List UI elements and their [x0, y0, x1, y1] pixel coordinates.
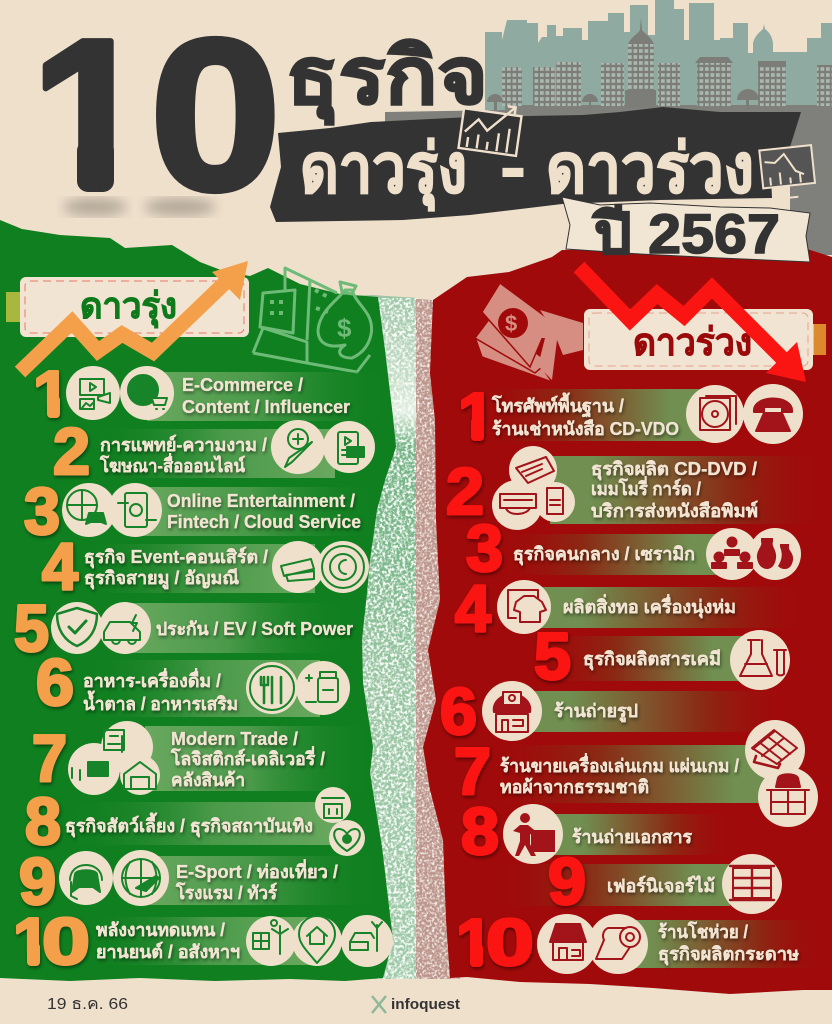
- row 10 falling: ธุรกิจผลิตกระดาษ: [658, 944, 799, 966]
- row 1 falling: โทรศัพท์พื้นฐาน /: [491, 392, 624, 418]
- row 7 falling: 7: [454, 734, 491, 808]
- row 9 rising: [19, 844, 385, 918]
- row 7 rising: Modern Trade /: [171, 729, 298, 749]
- year label: ปี 2567: [592, 202, 780, 265]
- row 6 falling: [440, 674, 795, 748]
- row 6 rising: [36, 645, 350, 719]
- row 7 rising: คลังสินค้า: [171, 770, 245, 790]
- row 8 falling: 8: [461, 794, 499, 868]
- row 5 rising: 5: [14, 591, 49, 665]
- panel: falling heading pill: [584, 309, 826, 370]
- row 2 rising: 2: [53, 414, 90, 488]
- row 10 rising: 1: [13, 904, 50, 978]
- dark torn banner: [270, 107, 801, 222]
- row 10 rising: ยานยนต์ / อสังหาฯ: [96, 941, 240, 962]
- banner headline falling: ดาวร่วง: [546, 131, 754, 207]
- row 2 falling: บริการส่งหนังสือพิมพ์: [591, 500, 758, 521]
- row 2 rising: โฆษณา-สื่อออนไลน์: [99, 453, 246, 476]
- row 6 falling: 6: [440, 674, 477, 748]
- row 2 falling: [446, 446, 832, 530]
- row 1 rising: Content / Influencer: [182, 397, 350, 417]
- logo: infoquest: [391, 996, 460, 1013]
- date: 19 ธ.ค. 66: [47, 996, 128, 1013]
- green panel: [0, 220, 396, 981]
- row 4 falling: ผลิตสิ่งทอ เครื่องนุ่งห่ม: [563, 594, 736, 619]
- row 7 falling: [454, 720, 818, 827]
- row 9 falling: 9: [548, 844, 586, 918]
- arrow: red falling: [579, 267, 806, 382]
- icon: falling chart monitor: [759, 145, 816, 200]
- row 2 rising: การแพทย์-ความงาม /: [100, 434, 267, 455]
- row 9 rising: E-Sport / ท่องเที่ยว /: [176, 859, 338, 882]
- row 10 falling: 0: [486, 905, 534, 979]
- row 8 rising: ธุรกิจสัตว์เลี้ยง / ธุรกิจสถาบันเทิง: [65, 812, 313, 838]
- row 2 rising: [53, 414, 375, 488]
- row 1 falling: ร้านเช่าหนังสือ CD-VDO: [492, 419, 679, 439]
- row 3 rising: 3: [24, 474, 60, 548]
- panel: falling heading pill: ดาวร่วง: [633, 322, 752, 364]
- row 9 rising: 9: [19, 844, 56, 918]
- row 7 falling: ทอผ้าจากธรรมชาติ: [500, 777, 649, 797]
- row 7 rising: โลจิสติกส์-เดลิเวอรี่ /: [170, 746, 325, 769]
- row 8 rising: [25, 784, 365, 858]
- row 8 rising: 8: [25, 784, 61, 858]
- row 2 falling: เมมโมรี่ การ์ด /: [591, 476, 701, 499]
- row 3 rising: [24, 474, 385, 548]
- year torn paper: [562, 197, 810, 262]
- row 4 rising: [42, 529, 369, 603]
- row 3 falling: 3: [466, 511, 503, 585]
- row 6 rising: อาหาร-เครื่องดื่ม /: [83, 668, 221, 691]
- row 10 falling: 1: [456, 905, 493, 979]
- row 9 rising: โรงแรม / ทัวร์: [175, 882, 277, 903]
- banner dash: -: [500, 129, 526, 205]
- row 10 falling: [458, 914, 802, 974]
- row 6 rising: 6: [36, 645, 74, 719]
- row 10 rising: พลังงานทดแทน /: [96, 920, 225, 940]
- row 1 rising: [36, 366, 390, 422]
- icon: rising chart monitor: [459, 100, 523, 156]
- row 10 falling: ร้านโชห่วย /: [658, 921, 748, 942]
- row 7 falling: ร้านขายเครื่องเล่นเกม แผ่นเกม /: [500, 753, 739, 776]
- arrow: orange rising: [20, 261, 248, 372]
- row 9 falling: เฟอร์นิเจอร์ไม้: [607, 875, 715, 896]
- row 3 falling: [466, 511, 801, 585]
- row 4 rising: ธุรกิจ Event-คอนเสิร์ต /: [84, 546, 268, 569]
- row 4 falling: [455, 571, 815, 645]
- row 10 rising: 0: [42, 904, 90, 978]
- row 2 falling: 2: [446, 454, 484, 528]
- row 6 rising: น้ำตาล / อาหารเสริม: [83, 690, 238, 714]
- row 4 falling: 4: [455, 571, 491, 645]
- row 5 falling: 5: [534, 619, 571, 693]
- banner headline: ดาวรุ่ง: [300, 131, 467, 211]
- row 1 falling: [460, 384, 803, 445]
- row 1 falling: 1: [458, 379, 495, 453]
- row 8 falling: [461, 794, 735, 868]
- row 6 falling: ร้านถ่ายรูป: [554, 701, 638, 723]
- title word: ธุรกิจ: [286, 32, 488, 125]
- row 3 falling: ธุรกิจคนกลาง / เซรามิก: [513, 544, 695, 566]
- row 5 rising: [14, 591, 353, 665]
- row 5 rising: ประกัน / EV / Soft Power: [156, 619, 353, 639]
- row 7 rising: 7: [32, 721, 67, 795]
- row 10 rising: [16, 915, 393, 970]
- row 1 rising: 1: [33, 357, 70, 431]
- panel: rising heading pill: [6, 277, 249, 337]
- row 2 falling: ธุรกิจผลิต CD-DVD /: [591, 459, 757, 481]
- title number 10: 1: [31, 0, 151, 235]
- panel: rising heading pill: ดาวรุ่ง: [80, 285, 177, 329]
- row 7 rising: [32, 721, 380, 795]
- title number 10: 0: [150, 0, 281, 235]
- row 3 rising: Online Entertainment /: [167, 491, 355, 511]
- city skyline illustration: [385, 0, 832, 255]
- row 1 rising: E-Commerce /: [182, 375, 303, 395]
- icon: hand with cash: [475, 283, 583, 382]
- row 8 falling: ร้านถ่ายเอกสาร: [572, 827, 692, 847]
- row 4 rising: 4: [42, 529, 78, 603]
- icon: city and money bag outline: [253, 268, 371, 372]
- icon: hand with cash: $: [505, 311, 517, 336]
- row 3 rising: Fintech / Cloud Service: [167, 512, 361, 532]
- row 5 falling: [530, 619, 790, 693]
- paper texture strip: [345, 295, 460, 979]
- row 9 falling: [490, 844, 782, 918]
- row 4 rising: ธุรกิจสายมู / อัญมณี: [84, 568, 239, 590]
- title number 10: [42, 36, 275, 218]
- row 5 falling: ธุรกิจผลิตสารเคมี: [583, 649, 721, 671]
- icon: city and money bag outline: $: [337, 313, 352, 343]
- red panel: [423, 247, 832, 994]
